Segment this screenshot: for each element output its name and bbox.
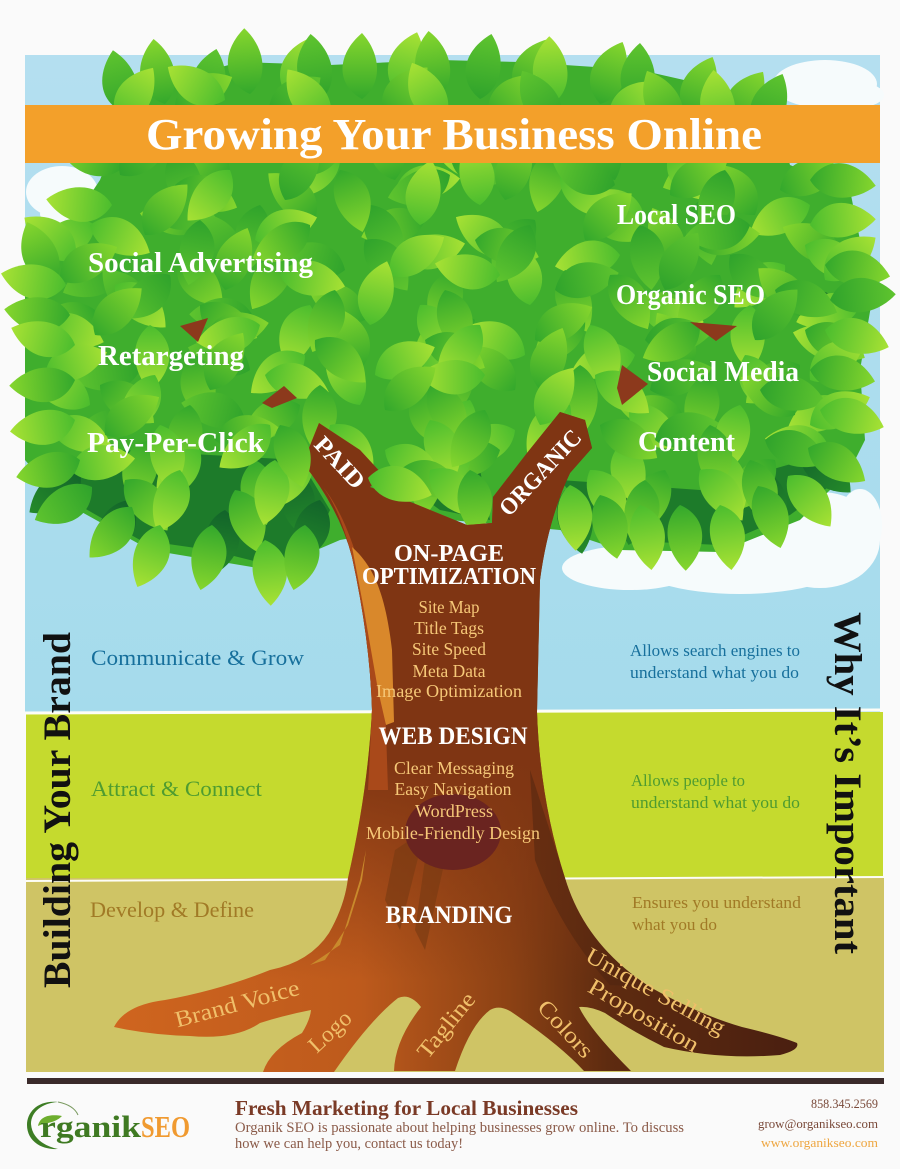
root labels: Tagline bbox=[412, 987, 480, 1063]
on-page optimization: Site Map bbox=[418, 597, 480, 617]
contact details: www.organikseo.com bbox=[761, 1135, 878, 1150]
on-page optimization: Image Optimization bbox=[376, 681, 522, 701]
tree canopy bbox=[0, 27, 897, 607]
clouds bbox=[26, 60, 884, 594]
right note: search engines bbox=[630, 641, 800, 682]
organic strategies: Local SEO bbox=[617, 199, 736, 231]
web design: Clear Messaging bbox=[394, 758, 514, 778]
top crown leaves bbox=[94, 27, 797, 141]
footer description: how we can help you, contact us today! bbox=[235, 1136, 463, 1152]
on-page optimization: Meta Data bbox=[412, 661, 486, 681]
right note: people: understand what you do bbox=[631, 793, 800, 812]
tree trunk and roots bbox=[114, 412, 797, 1072]
band dividers bbox=[25, 710, 883, 881]
outer leaves bbox=[0, 161, 897, 607]
right note: ensures: Ensures you understand bbox=[632, 893, 802, 912]
web design: Mobile-Friendly Design bbox=[366, 823, 540, 843]
front leaves over trunk bbox=[266, 418, 437, 510]
logo bbox=[27, 1102, 190, 1149]
right note: ensures: what you do bbox=[632, 915, 717, 934]
logo arc bbox=[58, 1102, 78, 1115]
branch label: paid: PAID bbox=[308, 432, 370, 495]
logo seo: SEO bbox=[141, 1109, 190, 1144]
branch wedges bbox=[180, 318, 737, 408]
paid strategies: Pay-Per-Click bbox=[87, 427, 265, 459]
sky band bbox=[25, 55, 880, 713]
logo leaf bbox=[38, 1115, 62, 1126]
on-page optimization: Title Tags bbox=[414, 618, 484, 638]
contact details bbox=[758, 1096, 878, 1150]
root labels bbox=[172, 943, 730, 1063]
knothole bbox=[405, 794, 501, 870]
logo swoosh bbox=[27, 1102, 58, 1149]
web design: WordPress bbox=[415, 801, 493, 821]
inner leaves bbox=[36, 118, 885, 557]
lower highlight bbox=[310, 850, 366, 965]
footer description: Organik SEO is passionate about helping businesses grow online. To discuss bbox=[235, 1120, 684, 1136]
footer description bbox=[235, 1120, 684, 1152]
trunk highlight bbox=[352, 547, 394, 725]
footer tagline: Fresh Marketing for Local Businesses bbox=[235, 1096, 578, 1120]
canopy base bbox=[25, 60, 872, 570]
title: Growing Your Business Online bbox=[146, 110, 762, 159]
paid strategies: Social Advertising bbox=[88, 247, 313, 279]
web design: Easy Navigation bbox=[394, 779, 512, 799]
right note: people: Allows people to bbox=[631, 771, 745, 790]
shadow under canopy bbox=[40, 450, 845, 565]
footer rule bbox=[27, 1078, 884, 1084]
contact details: 858.345.2569 bbox=[811, 1096, 878, 1111]
mirrored inner leaves bbox=[15, 98, 864, 537]
trunk shadow right bbox=[530, 770, 650, 987]
on-page optimization: OPTIMIZATION bbox=[362, 564, 537, 590]
web design: WEB DESIGN bbox=[378, 723, 528, 750]
right note: search engines: Allows search engines to bbox=[630, 641, 800, 660]
tan band bbox=[26, 878, 884, 1072]
right note: people bbox=[631, 771, 800, 812]
organic strategies: Social Media bbox=[647, 356, 799, 388]
dark leaves at underside bbox=[20, 282, 863, 578]
web design bbox=[366, 723, 540, 843]
organic strategies: Organic SEO bbox=[616, 279, 765, 311]
organic strategies bbox=[616, 199, 799, 458]
left label: communicate: Communicate & Grow bbox=[91, 645, 304, 670]
paid strategies bbox=[87, 247, 313, 459]
on-page optimization: ON-PAGE bbox=[394, 541, 504, 567]
paid strategies: Retargeting bbox=[98, 340, 244, 372]
inner grain bbox=[385, 830, 445, 950]
root labels: Brand Voice bbox=[172, 975, 302, 1032]
branding: BRANDING bbox=[386, 902, 512, 929]
logo wordmark: rganik bbox=[40, 1109, 142, 1144]
right note: search engines: understand what you do bbox=[630, 663, 799, 682]
on-page optimization bbox=[362, 541, 537, 701]
right note: ensures bbox=[632, 893, 802, 934]
side heading: why it's important: Why It’s Important bbox=[826, 612, 869, 954]
left label: develop: Develop & Define bbox=[90, 897, 254, 922]
left label: attract: Attract & Connect bbox=[91, 776, 262, 801]
branch label: organic: ORGANIC bbox=[495, 425, 587, 522]
yellow-green band bbox=[26, 712, 883, 878]
trunk left shade bbox=[323, 487, 388, 790]
side heading: building your brand: Building Your Brand bbox=[36, 632, 79, 988]
root labels: Unique Selling bbox=[581, 943, 730, 1040]
root labels: Proposition bbox=[584, 974, 704, 1058]
on-page optimization: Site Speed bbox=[412, 639, 486, 659]
contact details: grow@organikseo.com bbox=[758, 1116, 878, 1131]
title banner bbox=[25, 105, 880, 163]
root labels: Logo bbox=[303, 1005, 357, 1058]
organic strategies: Content bbox=[638, 426, 735, 458]
root labels: Colors bbox=[532, 995, 599, 1063]
